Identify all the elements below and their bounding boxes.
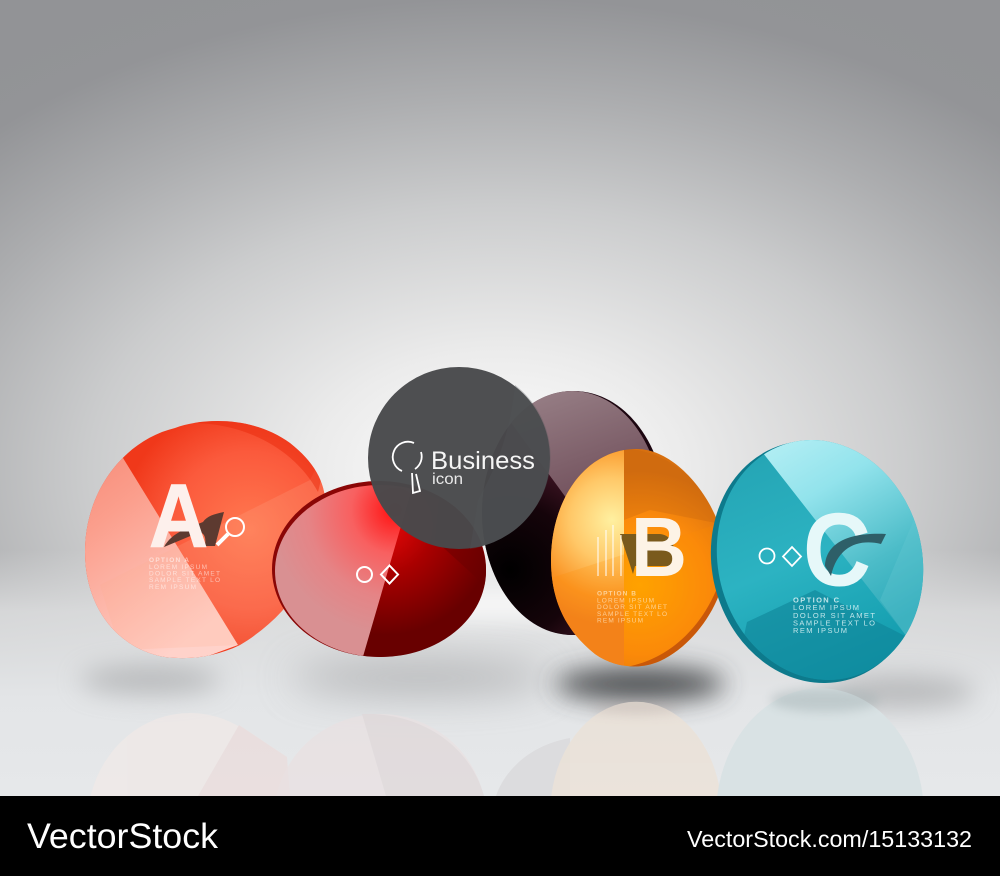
option B text: LOREM IPSUM — [597, 598, 654, 604]
disc: maroon — [485, 391, 654, 635]
option B text: SAMPLE TEXT LO — [597, 611, 667, 618]
option A text: OPTION A — [149, 557, 189, 564]
disc: red — [272, 481, 486, 657]
icon: magnifier — [217, 518, 244, 545]
option A text: SAMPLE TEXT LO — [149, 577, 220, 584]
option C text: SAMPLE TEXT LO — [793, 618, 875, 628]
icon: B shadow — [620, 534, 674, 574]
icon: vertical lines — [598, 525, 621, 576]
letter A: A — [149, 467, 208, 567]
option B text: DOLOR SIT AMET — [597, 604, 667, 611]
option A text — [149, 557, 220, 591]
option C text: REM IPSUM — [793, 626, 847, 635]
letter B: B — [631, 500, 687, 594]
floor shadows — [80, 662, 975, 708]
icon: circle and diamond — [357, 566, 398, 584]
reflection: maroon disc — [496, 738, 570, 796]
reflection: red disc — [276, 714, 484, 796]
icon: A swoosh shadow — [164, 512, 224, 547]
reflection: disc A — [90, 713, 290, 796]
icon: C swoosh shadow — [825, 534, 886, 576]
option C text: OPTION C — [793, 596, 840, 604]
VectorStock logo: VectorStock — [27, 817, 219, 856]
reflection: orange disc — [551, 701, 721, 796]
icon: circle and diamond — [760, 547, 801, 566]
footer bar — [0, 796, 1000, 876]
option C text: LOREM IPSUM — [793, 603, 859, 612]
option B text: OPTION B — [597, 590, 636, 598]
letter C: C — [803, 492, 871, 608]
option B text: REM IPSUM — [597, 618, 643, 624]
icon: key — [393, 442, 422, 493]
disc: Business icon — [368, 367, 551, 549]
disc: orange B — [551, 449, 718, 666]
option C text — [793, 596, 875, 635]
option B text — [597, 590, 667, 624]
disc: A — [85, 421, 324, 658]
option C text: DOLOR SIT AMET — [793, 611, 875, 620]
reflections — [90, 688, 923, 796]
icon label: icon — [432, 471, 463, 488]
Business heading: Business — [431, 447, 535, 475]
option A text: LOREM IPSUM — [149, 564, 207, 571]
image URL: VectorStock.com/15133132 — [687, 826, 972, 852]
reflection: teal disc — [717, 688, 923, 796]
option A text: REM IPSUM — [149, 584, 196, 591]
option A text: DOLOR SIT AMET — [149, 570, 220, 578]
disc: teal C — [710, 440, 924, 683]
